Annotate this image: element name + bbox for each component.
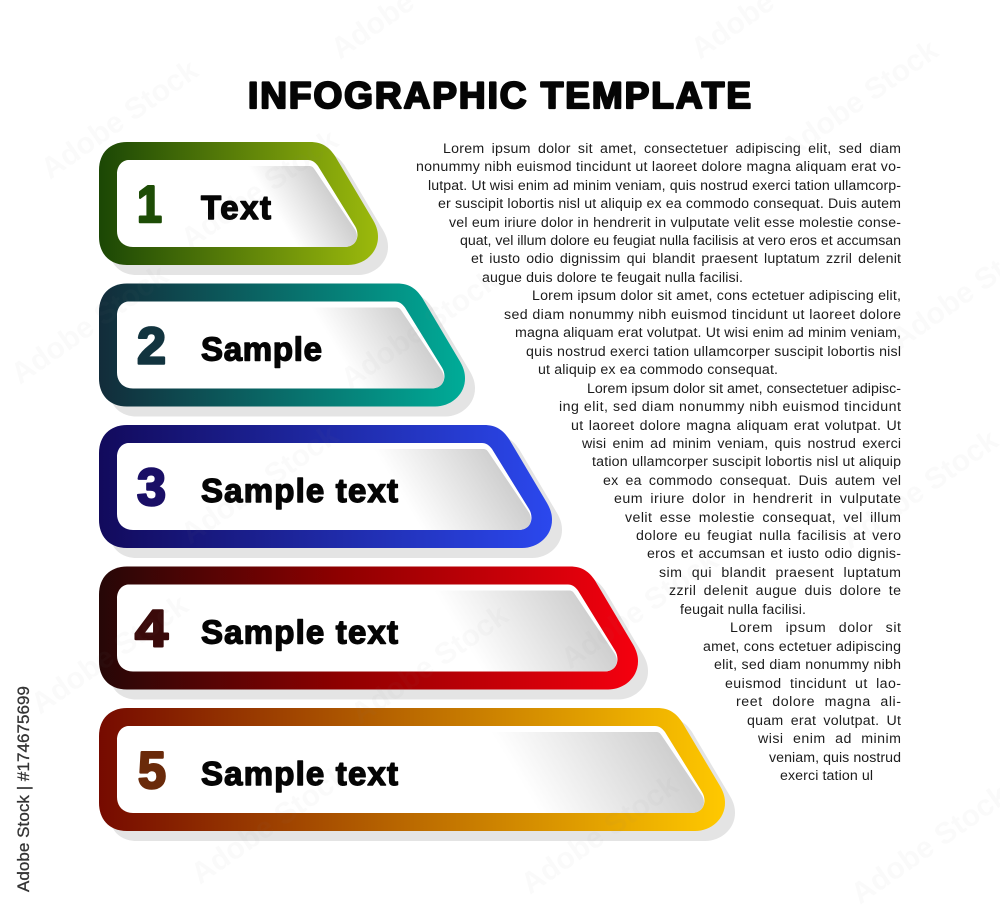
watermark: Adobe Stock	[345, 598, 514, 731]
watermark: Adobe Stock	[5, 258, 174, 391]
number 4: 4	[135, 600, 168, 658]
frame 5	[99, 708, 725, 831]
panel: item 5	[99, 708, 735, 841]
watermark: Adobe Stock	[835, 423, 1000, 556]
text block: lorem paragraphs: dolore eu feugiat nulla facilisis at vero	[636, 528, 901, 544]
sheen 4	[150, 590, 617, 672]
text block: lorem paragraphs: velit esse molestie consequat, vel illum	[625, 510, 901, 526]
inner 1	[117, 160, 357, 247]
text block: lorem paragraphs: et iusto odio dignissim qui blandit praesent luptatum zzril delenit	[471, 251, 901, 267]
label 1: Text	[201, 189, 271, 226]
text block: lorem paragraphs: quam erat volutpat. Ut	[747, 713, 901, 729]
text block: lorem paragraphs: Lorem ipsum dolor sit amet, consectetuer adipiscing elit, sed diam	[443, 141, 901, 157]
watermark: Adobe Stock	[35, 53, 204, 186]
frame 4	[99, 566, 638, 690]
label 4: Sample text	[201, 614, 398, 650]
number 2: 2	[137, 318, 166, 376]
text block: lorem paragraphs: magna aliquam erat volutpat. Ut wisi enim ad minim veniam,	[515, 325, 901, 341]
text block: lorem paragraphs: reet dolore magna ali-	[736, 694, 901, 710]
text block: lorem paragraphs	[416, 141, 901, 784]
frame 3	[99, 425, 552, 548]
watermark: Adobe Stock	[515, 768, 684, 901]
panel: item 3	[99, 425, 562, 558]
frame 1	[99, 142, 378, 265]
panel: item 4	[99, 566, 648, 700]
inner 3	[117, 443, 531, 530]
text block: lorem paragraphs: augue duis dolore te feugait nulla facilisi.	[482, 270, 743, 286]
text block: lorem paragraphs: nonummy nibh euismod tincidunt ut laoreet dolore magna aliquam erat vo-	[416, 159, 901, 175]
sheen 5	[150, 732, 704, 813]
title: INFOGRAPHIC TEMPLATE	[248, 75, 751, 116]
text block: lorem paragraphs: euismod tincidunt ut lao-	[725, 676, 901, 692]
sheen 2	[150, 308, 444, 388]
sheen 1	[150, 166, 357, 247]
text block: lorem paragraphs: ex ea commodo consequat. Duis autem vel	[603, 473, 901, 489]
watermark: Adobe Stock	[25, 588, 194, 721]
text block: lorem paragraphs: sim qui blandit praesent luptatum	[659, 565, 901, 581]
shadow 4	[109, 576, 648, 700]
text block: lorem paragraphs: zzril delenit augue duis dolore te	[669, 583, 901, 599]
frame 2	[99, 284, 465, 406]
text block: lorem paragraphs: ut laoreet dolore magna aliquam erat volutpat. Ut	[571, 418, 901, 434]
watermark: Adobe Stock	[775, 33, 944, 166]
panel: item 1	[99, 142, 388, 275]
text block: lorem paragraphs: exerci tation ul	[780, 768, 873, 784]
text block: lorem paragraphs: lutpat. Ut wisi enim ad minim veniam, quis nostrud exerci tation ullamcorp-	[428, 178, 901, 194]
sheen 3	[150, 449, 531, 530]
panel: item 2	[99, 284, 475, 416]
text block: lorem paragraphs: ing elit, sed diam nonummy nibh euismod tincidunt	[559, 399, 901, 415]
shadow 1	[109, 152, 388, 275]
text block: lorem paragraphs: eum iriure dolor in hendrerit in vulputate	[614, 491, 901, 507]
text block: lorem paragraphs: vel eum iriure dolor in hendrerit in vulputate velit esse molestie conse-	[449, 215, 901, 231]
shadow 2	[109, 294, 475, 416]
text block: lorem paragraphs: veniam, quis nostrud	[769, 750, 901, 766]
inner 4	[117, 584, 617, 672]
text block: lorem paragraphs: amet, cons ectetuer adipiscing	[703, 639, 901, 655]
watermark: Adobe Stock	[175, 123, 344, 256]
watermark: Adobe Stock	[335, 263, 504, 396]
inner 5	[117, 726, 704, 813]
number 3: 3	[137, 459, 166, 517]
shadow 3	[109, 435, 562, 558]
text block: lorem paragraphs: quis nostrud exerci tation ullamcorper suscipit lobortis nisl	[526, 344, 901, 360]
text block: lorem paragraphs: wisi enim ad minim veniam, quis nostrud exerci	[581, 436, 901, 452]
text block: lorem paragraphs: eros et accumsan et iusto odio dignis-	[647, 546, 901, 562]
text block: lorem paragraphs: ut aliquip ex ea commodo consequat.	[538, 362, 778, 378]
text block: lorem paragraphs: Lorem ipsum dolor sit amet, consectetuer adipisc-	[587, 381, 901, 397]
shadow 5	[109, 718, 735, 841]
label 2: Sample	[201, 330, 322, 368]
text block: lorem paragraphs: feugait nulla facilisi.	[680, 602, 806, 618]
text block: lorem paragraphs: quat, vel illum dolore eu feugiat nulla facilisis at vero eros et accumsan	[460, 233, 901, 249]
text block: lorem paragraphs: sed diam nonummy nibh euismod tincidunt ut laoreet dolore	[504, 307, 901, 323]
vertical stock credit: Adobe Stock | #174675699	[14, 686, 33, 892]
label 3: Sample text	[201, 472, 398, 509]
text block: lorem paragraphs: wisi enim ad minim	[757, 731, 901, 747]
text block: lorem paragraphs: Lorem ipsum dolor sit amet, cons ectetuer adipiscing elit,	[532, 288, 901, 304]
inner 2	[117, 302, 444, 388]
text block: lorem paragraphs: elit, sed diam nonummy nibh	[714, 657, 901, 673]
label 5: Sample text	[201, 755, 398, 792]
text block: lorem paragraphs: tation ullamcorper suscipit lobortis nisl ut aliquip	[592, 454, 901, 470]
number 1: 1	[137, 176, 162, 234]
text block: lorem paragraphs: er suscipit lobortis nisl ut aliquip ex ea commodo consequat. Duis autem	[438, 196, 901, 212]
watermark: Adobe Stock	[185, 758, 354, 891]
watermark: Adobe Stock	[175, 418, 344, 551]
number 5: 5	[138, 742, 166, 800]
watermark: Adobe Stock	[555, 543, 724, 676]
text block: lorem paragraphs: Lorem ipsum dolor sit	[730, 620, 901, 636]
